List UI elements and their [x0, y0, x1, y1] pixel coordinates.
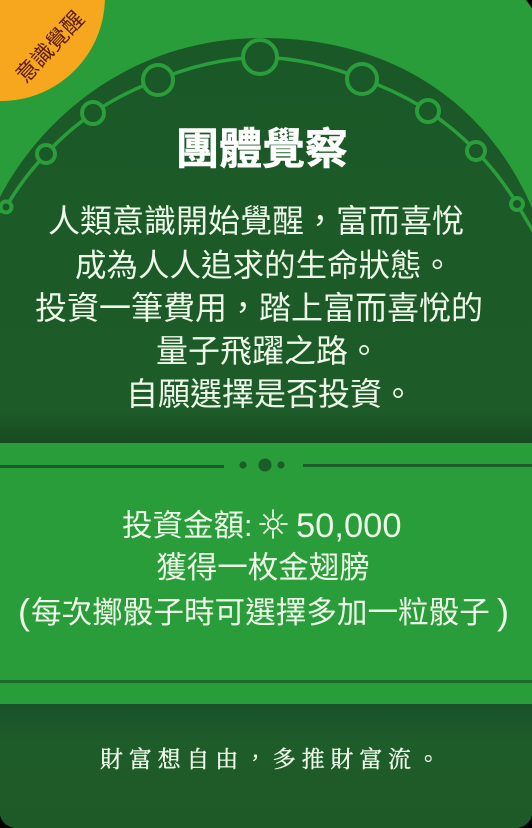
bottom divider	[0, 680, 532, 683]
panel: footer	[0, 704, 532, 828]
icon: sun currency	[260, 510, 287, 538]
text block: description: 自願選擇是否投資。	[126, 369, 414, 415]
badge: orange corner: 意識覺醒	[11, 6, 89, 88]
text block: investment amount: 投資金額:	[122, 509, 252, 543]
text block: reward note: )	[497, 591, 509, 632]
corners	[0, 815, 532, 828]
text block: reward: 獲得一枚金翅膀	[156, 551, 370, 585]
text block: reward note: (	[18, 591, 30, 632]
divider with dots	[0, 458, 532, 472]
footer slogan: 財富想自由，多推財富流。	[100, 747, 446, 772]
badge: orange corner	[0, 0, 105, 101]
text block: description: 量子飛躍之路。	[156, 326, 380, 372]
title: 團體覺察	[176, 126, 348, 174]
text block: reward note: 每次擲骰子時可選擇多加一粒骰子	[31, 596, 490, 630]
text block: description: 成為人人追求的生命狀態。	[75, 240, 453, 286]
text block: description: 投資一筆費用，踏上富而喜悅的	[35, 283, 483, 329]
text block: description	[35, 196, 483, 415]
panel: upper dark arch	[0, 38, 532, 443]
text block: investment amount	[122, 507, 402, 545]
decorative ring arc with nodes	[0, 40, 532, 236]
text block: investment amount: 50,000	[296, 507, 402, 545]
text block: description: 人類意識開始覺醒，富而喜悅	[48, 196, 464, 242]
